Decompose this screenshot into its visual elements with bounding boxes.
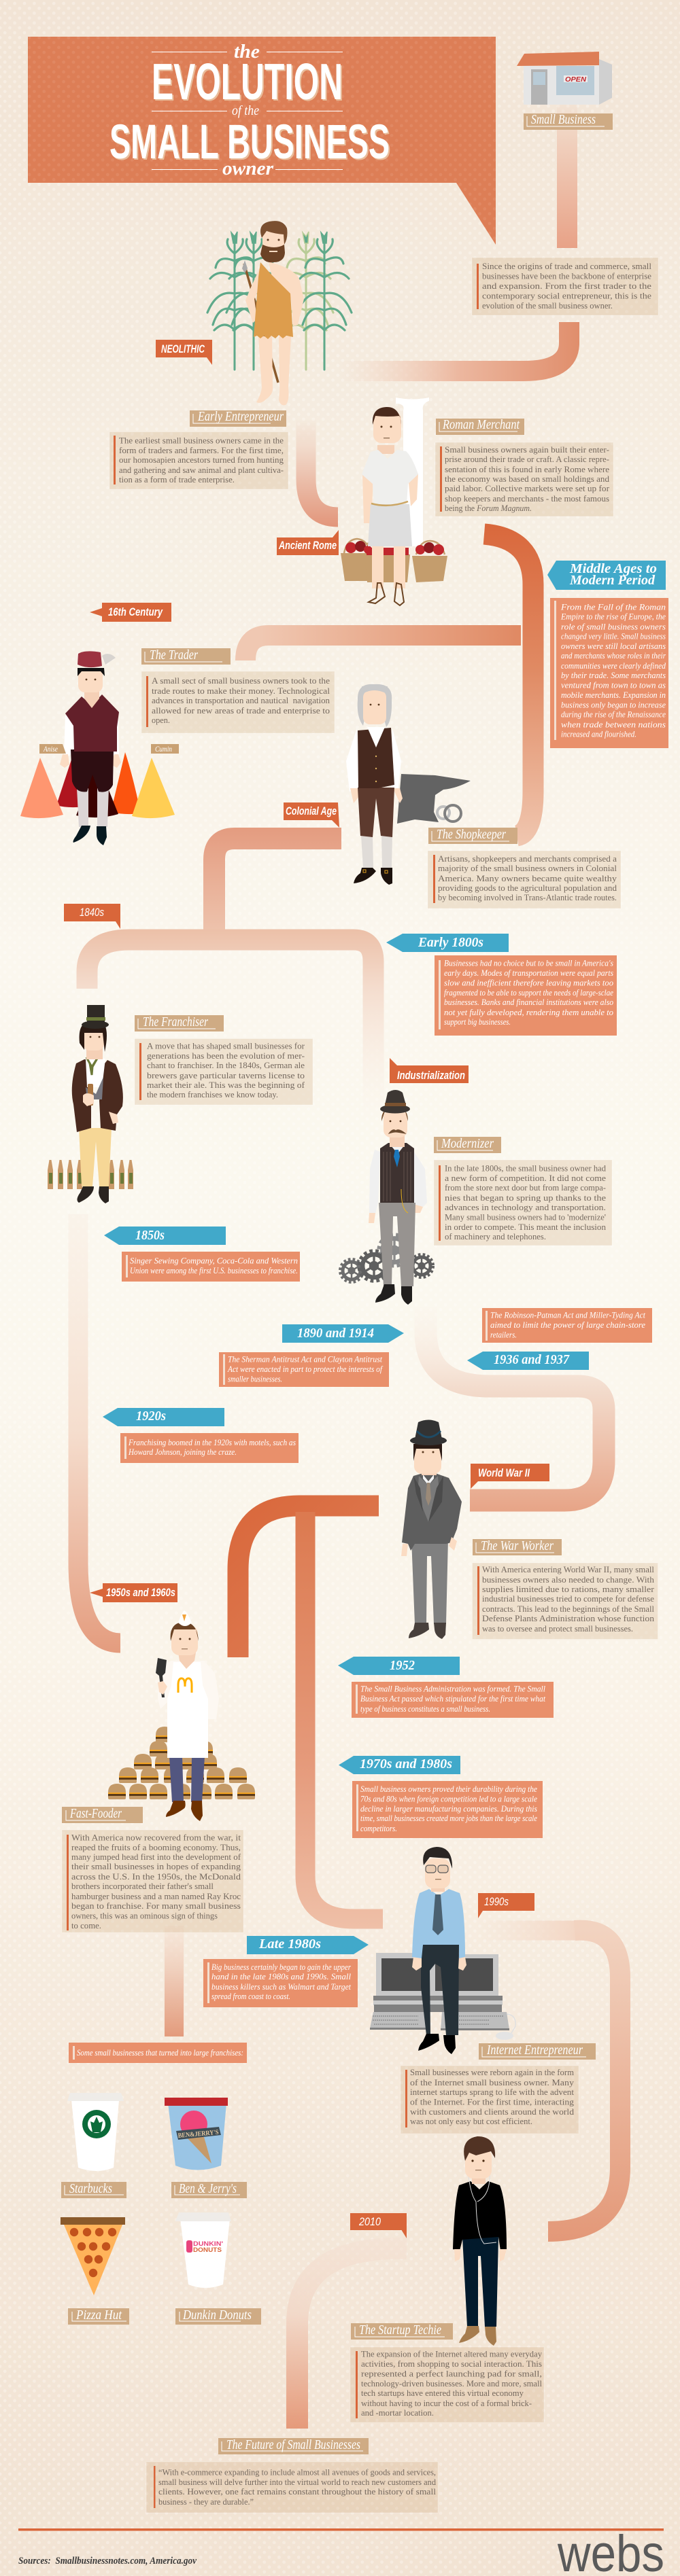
tag: Cumin: Cumin bbox=[155, 744, 172, 754]
tag: 16th Century bbox=[90, 603, 171, 622]
text: modernizer bbox=[434, 1160, 612, 1246]
text: early 1800s: businesses. Banks and financial institutions were also bbox=[444, 997, 613, 1007]
text: 1970s and 1980s bbox=[352, 1781, 543, 1838]
text: early entrepreneur: our homosapien ancestors turned from hunting bbox=[119, 455, 284, 465]
text: the franchiser: brewers gave particular taverns license to bbox=[147, 1070, 305, 1080]
text: early 1800s: slow and inefficient therefore leaving markets too bbox=[444, 977, 613, 988]
text: the future: “With e-commerce expanding to include almost all avenues of goods and services, bbox=[158, 2467, 436, 2477]
label: Pizza Hut: Pizza Hut bbox=[75, 2308, 122, 2323]
tag: Ancient Rome: Ancient Rome bbox=[278, 540, 337, 552]
text: roman merchant: prise around their trade or craft. A classic repre- bbox=[445, 454, 609, 464]
icon: startup techie bbox=[453, 2136, 507, 2346]
text: modernizer: in order to compete. This meant the inclusion bbox=[445, 1222, 606, 1232]
text: modernizer: In the late 1800s, the small business owner had bbox=[445, 1163, 606, 1173]
text: early entrepreneur: tion as a form of trade enterprise. bbox=[119, 474, 235, 484]
text: 1970s and 1980s: decline in larger manufacturing companies. During this bbox=[360, 1803, 537, 1814]
text: 1920s bbox=[120, 1433, 299, 1463]
text: fast-fooder: began to franchise. For many small business bbox=[71, 1901, 241, 1911]
text: the trader: allowed for new areas of trade and enterprise to bbox=[152, 705, 330, 716]
text: middle ages: mobile merchants. Expansion in bbox=[561, 690, 666, 700]
text: intro: Since the origins of trade and commerce, small bbox=[482, 261, 651, 271]
callout: franchises bbox=[69, 2043, 247, 2063]
tag: Early 1800s bbox=[386, 934, 509, 952]
text: early 1800s: Businesses had no choice but to be small in America's bbox=[444, 958, 613, 968]
text: early 1800s: not yet fully developed, rendering them unable to bbox=[444, 1007, 613, 1017]
text: fast-fooder: hamburger business and a man named Ray Kroc bbox=[71, 1891, 241, 1901]
text: 1890 and 1914: Act were enacted in part to protect the interests of bbox=[227, 1364, 384, 1374]
label: Early Entrepreneur bbox=[190, 409, 286, 427]
text: middle ages: by their trade. Some merchants bbox=[561, 670, 666, 680]
title speech bubble: the bbox=[234, 41, 260, 63]
tag: 1970s and 1980s: 1970s and 1980s bbox=[360, 1757, 452, 1771]
tag: Anise: Anise bbox=[43, 744, 58, 754]
text: the startup techie: and -mortar location. bbox=[361, 2407, 434, 2418]
text: roman merchant: sentation of this is found in early Rome where bbox=[445, 464, 609, 474]
path: 1990s right bbox=[548, 1930, 620, 2231]
text: the war worker bbox=[472, 1563, 658, 1639]
text: middle ages: Empire to the rise of Europe, the bbox=[560, 612, 666, 622]
text: fast-fooder: brothers incorporated their father's small bbox=[71, 1881, 214, 1891]
text: internet entrepreneur bbox=[401, 2066, 579, 2134]
tag: Neolithic: NEOLITHIC bbox=[161, 343, 205, 355]
tag: 1850s: 1850s bbox=[135, 1228, 165, 1243]
text: roman merchant: Small business owners again built their enter- bbox=[445, 444, 609, 455]
text: the future: clients. However, one fact remains constant throughout the history of small bbox=[158, 2486, 436, 2496]
text: the startup techie: technology-driven businesses. More and more, small bbox=[361, 2378, 542, 2388]
text: the startup techie bbox=[350, 2347, 544, 2422]
icon: trader with spice cones bbox=[20, 651, 175, 845]
icon: modernizer with gears bbox=[341, 1090, 432, 1305]
label: The Shopkeeper: The Shopkeeper bbox=[437, 827, 506, 842]
text: 1952 bbox=[352, 1682, 554, 1718]
text: the startup techie: The expansion of the Internet altered many everyday bbox=[361, 2348, 542, 2359]
text: early entrepreneur: and gathering and saw animal and plant cultiva- bbox=[119, 465, 284, 475]
text: the future bbox=[146, 2462, 438, 2513]
text: the shopkeeper: America. Many owners became quite wealthy bbox=[438, 873, 617, 883]
icon: Ben and Jerry's cup bbox=[165, 2098, 228, 2170]
label: The Startup Techie: The Startup Techie bbox=[359, 2323, 441, 2337]
text: Robinson-Patman bbox=[482, 1308, 652, 1343]
text: roman merchant: being the Forum Magnum. bbox=[445, 503, 532, 513]
text: 1970s and 1980s: competitors. bbox=[360, 1823, 397, 1833]
text: 1970s and 1980s: 70s and 80s when foreign competition led to a large scale bbox=[360, 1794, 537, 1803]
text: Robinson-Patman: retailers. bbox=[490, 1329, 517, 1340]
text: modernizer: nies that began to spring up thanks to the bbox=[445, 1193, 606, 1203]
text: early entrepreneur: form of traders and farmers. For the first time, bbox=[119, 445, 284, 455]
text: 1890 and 1914 bbox=[219, 1352, 389, 1387]
text: late 1980s: hand in the late 1980s and 1990s. Small bbox=[211, 1971, 351, 1981]
title speech bubble: of the bbox=[232, 103, 259, 118]
text: the franchiser: market their ale. This was the beginning of bbox=[147, 1080, 305, 1090]
path: 1990s top bbox=[476, 1920, 575, 1941]
text: roman merchant: shop keepers and merchants - the most famous bbox=[445, 493, 609, 504]
tag: Neolithic bbox=[156, 340, 212, 365]
text: 1850s bbox=[122, 1252, 300, 1282]
label: The War Worker: The War Worker bbox=[481, 1538, 554, 1553]
text: middle ages: owners were still local artisans bbox=[561, 641, 666, 651]
tag: 1952: 1952 bbox=[390, 1658, 415, 1673]
text: middle ages: communities were clearly defined bbox=[561, 660, 666, 671]
text: the shopkeeper: providing goods to the agricultural population and bbox=[438, 883, 617, 893]
text: internet entrepreneur: internet startups sprang to life with the advent bbox=[410, 2087, 574, 2097]
label: The Franchiser: The Franchiser bbox=[143, 1014, 208, 1029]
label: Small Business: Small Business bbox=[531, 112, 596, 127]
text: fast-fooder: reaped the fruits of a booming economy. Thus, bbox=[71, 1842, 241, 1852]
icon: burger pile bbox=[108, 1727, 255, 1799]
icon: Ben and Jerry's cup: BEN&JERRY'S bbox=[177, 2129, 219, 2140]
title speech bubble: owner bbox=[222, 158, 274, 179]
text: 1850s: Singer Sewing Company, Coca-Cola and Western bbox=[130, 1256, 298, 1265]
icon: pizza slice bbox=[61, 2217, 125, 2295]
path: to trader bbox=[245, 635, 521, 660]
tag: 1850s bbox=[104, 1227, 226, 1245]
label: Roman Merchant: Roman Merchant bbox=[442, 417, 520, 432]
tag: Early 1800s: Early 1800s bbox=[418, 935, 483, 950]
text: early 1800s: support big businesses. bbox=[444, 1017, 511, 1027]
title speech bubble: SMALL BUSINESS bbox=[109, 116, 390, 169]
text: middle ages: increased and flourished. bbox=[561, 729, 636, 739]
path: war to fast food bbox=[238, 1506, 379, 1657]
text: internet entrepreneur: of the Internet small business owner. Many bbox=[410, 2077, 575, 2087]
path: colonial bbox=[214, 839, 341, 934]
text: fast-fooder: their small businesses in hopes of expanding bbox=[71, 1861, 241, 1871]
tag: Industrialization: Industrialization bbox=[397, 1070, 465, 1082]
text: 1952: Business Act passed which stipulated for the first time what bbox=[360, 1693, 545, 1704]
text: roman merchant: paid labor. Collective markets were set up for bbox=[445, 483, 610, 493]
label: Internet Entrepreneur: Internet Entrepreneur bbox=[486, 2043, 583, 2058]
tag: 1990s bbox=[478, 1893, 534, 1918]
icon: neolithic farmer with corn bbox=[207, 221, 352, 405]
tag: 1950s and 1960s: 1950s and 1960s bbox=[106, 1587, 175, 1599]
title speech bubble: EVOLUTION bbox=[152, 53, 343, 110]
text: the war worker: With America entering World War II, many small bbox=[482, 1564, 654, 1574]
text: modernizer: advances in technology and transportation. bbox=[445, 1202, 606, 1212]
tag: World War II bbox=[471, 1464, 549, 1489]
tag: 1936 and 1937: 1936 and 1937 bbox=[494, 1352, 570, 1367]
text: fast-fooder: owners, this was an ominous sign of things bbox=[71, 1911, 218, 1920]
text: middle ages: when trade between nations bbox=[561, 719, 666, 729]
path: middle ages bbox=[484, 534, 533, 836]
text: the franchiser bbox=[135, 1038, 313, 1105]
path: to franchises bbox=[165, 1926, 184, 2036]
label: Starbucks: Starbucks bbox=[69, 2181, 112, 2196]
text: the trader: trade routes to make their money. Technological bbox=[152, 686, 330, 696]
tag: Middle Ages to Modern Period bbox=[547, 561, 666, 590]
text: the war worker: contracts. This lead to the beginnings of the Small bbox=[482, 1604, 654, 1614]
icon: franchiser with ale bottles bbox=[48, 1005, 133, 1203]
tag: Colonial Age: Colonial Age bbox=[286, 805, 337, 817]
text: 1850s: Union were among the first U.S. businesses to franchise. bbox=[130, 1265, 298, 1275]
text: intro: businesses have been the backbone of enterprise bbox=[482, 270, 651, 281]
text: the war worker: businesses owners also needed to change. With bbox=[482, 1574, 655, 1585]
text: internet entrepreneur: Small businesses were reborn again in the form bbox=[410, 2067, 574, 2077]
label: Ben and Jerry's: Ben & Jerry's bbox=[179, 2181, 237, 2196]
text: middle ages: role of small business owners bbox=[561, 621, 666, 631]
text: modernizer: of machinery and telephones. bbox=[445, 1231, 546, 1241]
text: late 1980s: business killers such as Walmart and Target bbox=[211, 1981, 351, 1992]
tag: 1840s bbox=[64, 904, 120, 929]
text: the trader: advances in transportation and nautical navigation bbox=[152, 695, 330, 705]
text: middle ages: business only began to increase bbox=[561, 700, 666, 709]
text: the franchiser: the modern franchises we know today. bbox=[147, 1089, 278, 1099]
text: Robinson-Patman: The Robinson-Patman Act and Miller-Tyding Act bbox=[490, 1310, 645, 1320]
tag: 1920s bbox=[103, 1408, 224, 1426]
tag: 1950s and 1960s bbox=[90, 1583, 177, 1602]
text: the trader: open. bbox=[152, 715, 170, 725]
path: modernizer to war worker bbox=[426, 1307, 604, 1500]
text: modernizer: from the store next door but from large compa- bbox=[445, 1182, 606, 1193]
text: intro: and expansion. From the first trader to the bbox=[482, 281, 651, 291]
text: late 1980s: spread from coast to coast. bbox=[211, 1991, 290, 2001]
tag: 1936 and 1937 bbox=[467, 1352, 589, 1370]
icon: Dunkin Donuts cup bbox=[175, 2212, 231, 2288]
text: the war worker: industrial businesses tried to compete for defense bbox=[482, 1593, 654, 1604]
text: 1952: The Small Business Administration was formed. The Small bbox=[360, 1683, 545, 1693]
text: 1890 and 1914: smaller businesses. bbox=[228, 1374, 282, 1383]
text: the war worker: supplies limited due to rations, many smaller bbox=[482, 1584, 655, 1594]
text: fast-fooder: across the U.S. In the 1950s, the McDonald bbox=[71, 1871, 241, 1882]
tag: Late 1980s: Late 1980s bbox=[258, 1937, 321, 1952]
text: middle ages: changed very little. Small business bbox=[561, 631, 666, 641]
tag: 1840s: 1840s bbox=[80, 906, 104, 919]
text: the franchiser: generations has been the evolution of mer- bbox=[147, 1051, 305, 1061]
path: war to internet bbox=[305, 1512, 383, 1919]
text: the shopkeeper: majority of the small business owners in Colonial bbox=[438, 863, 617, 873]
tag: 1970s and 1980s bbox=[339, 1756, 460, 1774]
text: fast-fooder: With America now recovered from the war, it bbox=[71, 1832, 241, 1843]
path: store to intro bbox=[557, 105, 577, 248]
tag: Late 1980s bbox=[247, 1936, 369, 1954]
text: early 1800s bbox=[435, 955, 617, 1036]
text: the trader: A small sect of small business owners took to the bbox=[152, 675, 330, 686]
tag: 1990s: 1990s bbox=[484, 1896, 509, 1908]
text: modernizer: Many small business owners had to 'modernize' bbox=[445, 1212, 606, 1222]
text: middle ages: From the Fall of the Roman bbox=[560, 601, 666, 612]
text: fast-fooder bbox=[62, 1830, 243, 1933]
text: the startup techie: tech startups have entered this virtual economy bbox=[361, 2388, 524, 2398]
text: the startup techie: without having to incur the cost of a formal brick- bbox=[361, 2398, 532, 2408]
text: fast-fooder: to come. bbox=[71, 1920, 101, 1930]
label: Early Entrepreneur: Early Entrepreneur bbox=[197, 409, 284, 424]
text: internet entrepreneur: was not only easy but cost efficient. bbox=[410, 2116, 532, 2126]
text: roman merchant: the economy was based on small holdings and bbox=[445, 474, 609, 484]
path: 1840s fork bbox=[87, 940, 373, 1121]
text: middle ages: during the rise of the Renaissance bbox=[561, 709, 666, 720]
tag: 2010 bbox=[350, 2213, 407, 2238]
icon: Dunkin Donuts cup: DUNKIN' bbox=[193, 2240, 223, 2247]
label: Roman Merchant bbox=[436, 417, 524, 435]
path: to future bbox=[297, 2248, 407, 2429]
text: 1890 and 1914: The Sherman Antitrust Act and Clayton Antitrust bbox=[228, 1354, 382, 1364]
text: Robinson-Patman: aimed to limit the power of large chain-store bbox=[490, 1320, 645, 1330]
text: the war worker: was to oversee and protect small businesses. bbox=[482, 1623, 633, 1634]
tag: Middle Ages to Modern Period: Middle Ages to bbox=[569, 561, 657, 576]
text: the future: business - they are durable.” bbox=[158, 2496, 254, 2507]
icon: Dunkin Donuts cup: DONUTS bbox=[193, 2246, 222, 2253]
path: long left run bbox=[78, 1214, 120, 1643]
icon: small business storefront bbox=[517, 52, 612, 105]
icon: roman merchant with column and apple baskets bbox=[341, 398, 447, 605]
text: 1920s: Franchising boomed in the 1920s with motels, such as bbox=[128, 1437, 296, 1447]
sources: Sources: Smallbusinessnotes.com, America.gov bbox=[18, 2556, 197, 2566]
icon: fast-food owner bbox=[156, 1610, 219, 1821]
text: the franchiser: A move that has shaped small businesses for bbox=[147, 1041, 305, 1051]
text: the startup techie: represented a perfect launching pad for small, bbox=[361, 2369, 542, 2378]
label: The Trader bbox=[141, 648, 231, 665]
tag: Industrialization bbox=[390, 1058, 469, 1083]
text: intro: evolution of the small business owner. bbox=[482, 300, 613, 311]
tag: 1920s: 1920s bbox=[136, 1409, 166, 1424]
path: intro to neolithic bbox=[339, 322, 569, 371]
text: the trader bbox=[141, 671, 335, 733]
text: internet entrepreneur: with customers and clients around the world bbox=[410, 2106, 575, 2117]
text: roman merchant bbox=[435, 442, 613, 516]
tag: Middle Ages to Modern Period: Modern Period bbox=[569, 573, 656, 588]
tag: 1890 and 1914: 1890 and 1914 bbox=[297, 1326, 374, 1341]
label: The Future of Small Businesses: The Future of Small Businesses bbox=[226, 2437, 360, 2452]
text: the shopkeeper: Artisans, shopkeepers and merchants comprised a bbox=[438, 853, 617, 864]
text: modernizer: a new form of competition. It did not come bbox=[445, 1173, 606, 1183]
icon: internet entrepreneur with computers bbox=[370, 1847, 515, 2054]
tag: Colonial Age bbox=[284, 802, 339, 828]
icon: shopkeeper with anvil bbox=[346, 684, 471, 885]
text: late 1980s bbox=[203, 1959, 358, 2007]
text: 1920s: Howard Johnson, joining the craze. bbox=[128, 1447, 237, 1457]
label: The Trader: The Trader bbox=[150, 648, 198, 663]
label: Modernizer: Modernizer bbox=[441, 1136, 494, 1151]
callout: franchises: Some small businesses that turned into large franchises: bbox=[77, 2047, 243, 2058]
tag: 16th Century: 16th Century bbox=[108, 606, 163, 618]
text: the franchiser: chant to franchiser. In the 1840s, German ale bbox=[147, 1060, 305, 1070]
text: the startup techie: activities, from shopping to social interaction. This bbox=[361, 2359, 542, 2369]
tag: 1890 and 1914 bbox=[282, 1324, 404, 1343]
text: the future: small business will delve further into the virtual world to reach new customers and bbox=[158, 2477, 436, 2487]
text: the shopkeeper bbox=[428, 851, 621, 908]
text: intro: contemporary social entrepreneur, this is the bbox=[482, 291, 651, 300]
text: intro bbox=[472, 258, 658, 315]
icon: Starbucks cup bbox=[67, 2093, 124, 2171]
text: early entrepreneur bbox=[109, 432, 288, 489]
tag: World War II: World War II bbox=[478, 1467, 530, 1479]
text: middle ages: ventured from town to town as bbox=[561, 680, 666, 690]
text: 1970s and 1980s: time, small businesses created more jobs than the large scale bbox=[360, 1813, 537, 1823]
title speech bubble bbox=[28, 37, 496, 245]
text: 1970s and 1980s: Small business owners proved their durability during the bbox=[360, 1784, 537, 1794]
tag: 2010: 2010 bbox=[358, 2216, 381, 2228]
label: Dunkin Donuts: Dunkin Donuts bbox=[182, 2308, 252, 2323]
label: Fast-Fooder: Fast-Fooder bbox=[69, 1806, 122, 1821]
text: early 1800s: early days. Modes of transportation were equal parts bbox=[444, 968, 613, 978]
text: the war worker: Defense Plants Administration whose function bbox=[482, 1613, 655, 1623]
tag: Ancient Rome bbox=[277, 530, 339, 555]
tag: Anise bbox=[39, 744, 66, 754]
icon: war worker bbox=[401, 1420, 462, 1639]
text: late 1980s: Big business certainly began to gain the upper bbox=[211, 1962, 352, 1972]
text: middle ages bbox=[550, 598, 668, 748]
tag: 1952 bbox=[338, 1657, 460, 1675]
text: the shopkeeper: by becoming involved in Trans-Atlantic trade routes. bbox=[438, 892, 617, 902]
text: 1952: type of business constitutes a small business. bbox=[360, 1704, 490, 1714]
text: early entrepreneur: The earliest small business owners came in the bbox=[119, 436, 284, 446]
text: internet entrepreneur: of the Internet. For the first time, interacting bbox=[410, 2097, 575, 2106]
text: early 1800s: fragmented to be able to support the needs of large-sclae bbox=[444, 987, 613, 998]
path: to ancient rome bbox=[306, 419, 338, 517]
icon: small business storefront: OPEN bbox=[565, 75, 586, 84]
text: fast-fooder: many jumped head first into the development of bbox=[71, 1852, 241, 1862]
